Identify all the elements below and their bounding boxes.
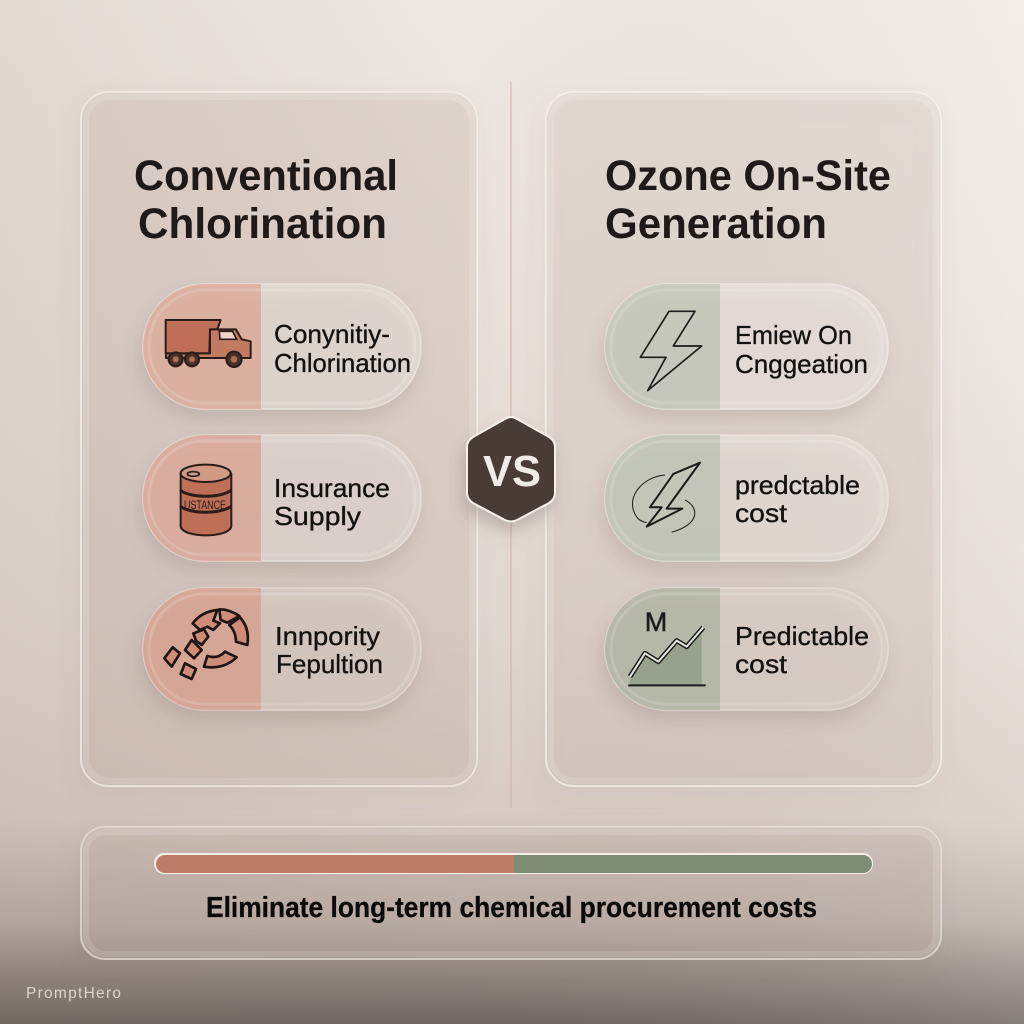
divider line — [510, 82, 512, 808]
pill: rising chart — [605, 588, 888, 710]
label: lightning row: Cnggeation — [735, 349, 868, 379]
heading: conventional chlorination: Conventional — [134, 152, 398, 200]
panel: ozone on-site generation — [546, 92, 941, 786]
label: rising chart row: cost — [735, 649, 788, 679]
icon: barrel — [180, 465, 231, 535]
pill: broken ring — [143, 588, 421, 710]
label: broken ring row — [275, 621, 383, 679]
label: circled bolt row — [735, 470, 860, 528]
panel: cost summary — [81, 827, 941, 959]
label: barrel row: Insurance — [274, 473, 390, 503]
pill: circled bolt — [605, 435, 888, 561]
heading: ozone on-site generation: Ozone On-Site — [605, 152, 891, 200]
heading: ozone on-site generation — [605, 152, 891, 248]
barrel label: USTANCE — [184, 498, 226, 512]
VS badge — [467, 417, 555, 522]
icon: broken ring — [164, 609, 248, 679]
heading: conventional chlorination: Chlorination — [138, 200, 387, 248]
heading: conventional chlorination — [134, 152, 398, 248]
heading: ozone on-site generation: Generation — [605, 200, 827, 248]
icon: circled lightning bolt — [632, 463, 700, 532]
icon: rising chart: M — [645, 607, 667, 637]
label: truck row: Chlorination — [274, 348, 411, 378]
watermark: PromptHero — [26, 985, 121, 1002]
label: rising chart row: Predictable — [735, 621, 869, 651]
progress bar: red to green — [154, 853, 873, 874]
label: lightning row: Emiew On — [735, 320, 852, 350]
summary text: Eliminate long-term chemical procurement costs — [206, 892, 817, 924]
label: lightning row — [735, 320, 868, 379]
label: rising chart row — [735, 621, 869, 679]
label: circled bolt row: predctable — [735, 470, 860, 500]
label: broken ring row: Fepultion — [276, 649, 383, 679]
label: broken ring row: Innpority — [275, 621, 380, 651]
pill: delivery truck — [143, 284, 421, 409]
icon: rising chart — [628, 607, 706, 685]
icon: truck — [166, 320, 251, 367]
icon: lightning bolt — [640, 311, 702, 391]
VS badge: VS — [483, 447, 541, 496]
pill: lightning — [605, 284, 888, 409]
label: circled bolt row: cost — [735, 498, 788, 528]
label: barrel row: Supply — [274, 501, 361, 531]
panel: conventional chlorination — [81, 92, 477, 786]
pill: chemical barrel — [143, 435, 421, 561]
label: truck row — [274, 319, 411, 378]
label: barrel row — [274, 473, 390, 531]
label: truck row: Conynitiy- — [274, 319, 390, 349]
